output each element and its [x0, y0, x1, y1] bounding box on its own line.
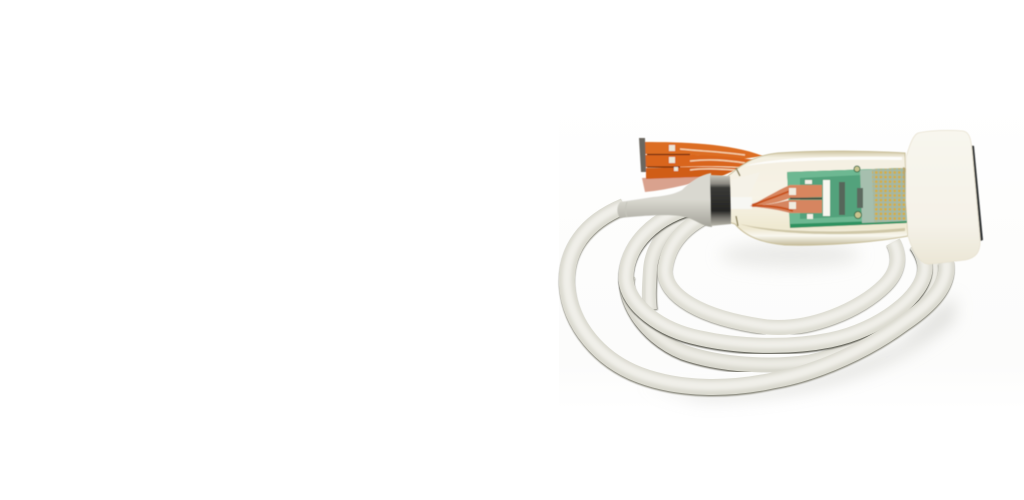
cable loop: lower — [627, 257, 935, 366]
ribbon: top — [645, 142, 763, 160]
orange flex ribbons behind the probe — [639, 138, 763, 192]
strain relief — [617, 173, 731, 227]
circuit board — [787, 166, 916, 228]
connector flap — [903, 167, 916, 212]
glass probe body — [728, 151, 916, 245]
ribbon: middle — [645, 155, 755, 167]
head body — [906, 130, 980, 264]
dark collar — [710, 175, 731, 226]
cable loop: outer main run — [567, 205, 947, 388]
ribbon labels — [669, 145, 678, 171]
cable loop: middle — [626, 204, 925, 347]
ribbon connector bar — [639, 138, 646, 172]
ribbon: lower — [646, 167, 740, 179]
cable loop: hidden upper arc — [649, 205, 716, 311]
white transducer head — [906, 130, 983, 264]
coiled cable — [567, 204, 947, 388]
photo background — [559, 100, 1024, 410]
internal flex cable — [750, 185, 822, 213]
cable loop: inner — [665, 207, 898, 328]
glass shell — [728, 151, 908, 245]
ribbon reflection — [642, 174, 722, 192]
head lens strip — [970, 145, 983, 242]
soft floor shadows — [640, 242, 955, 400]
